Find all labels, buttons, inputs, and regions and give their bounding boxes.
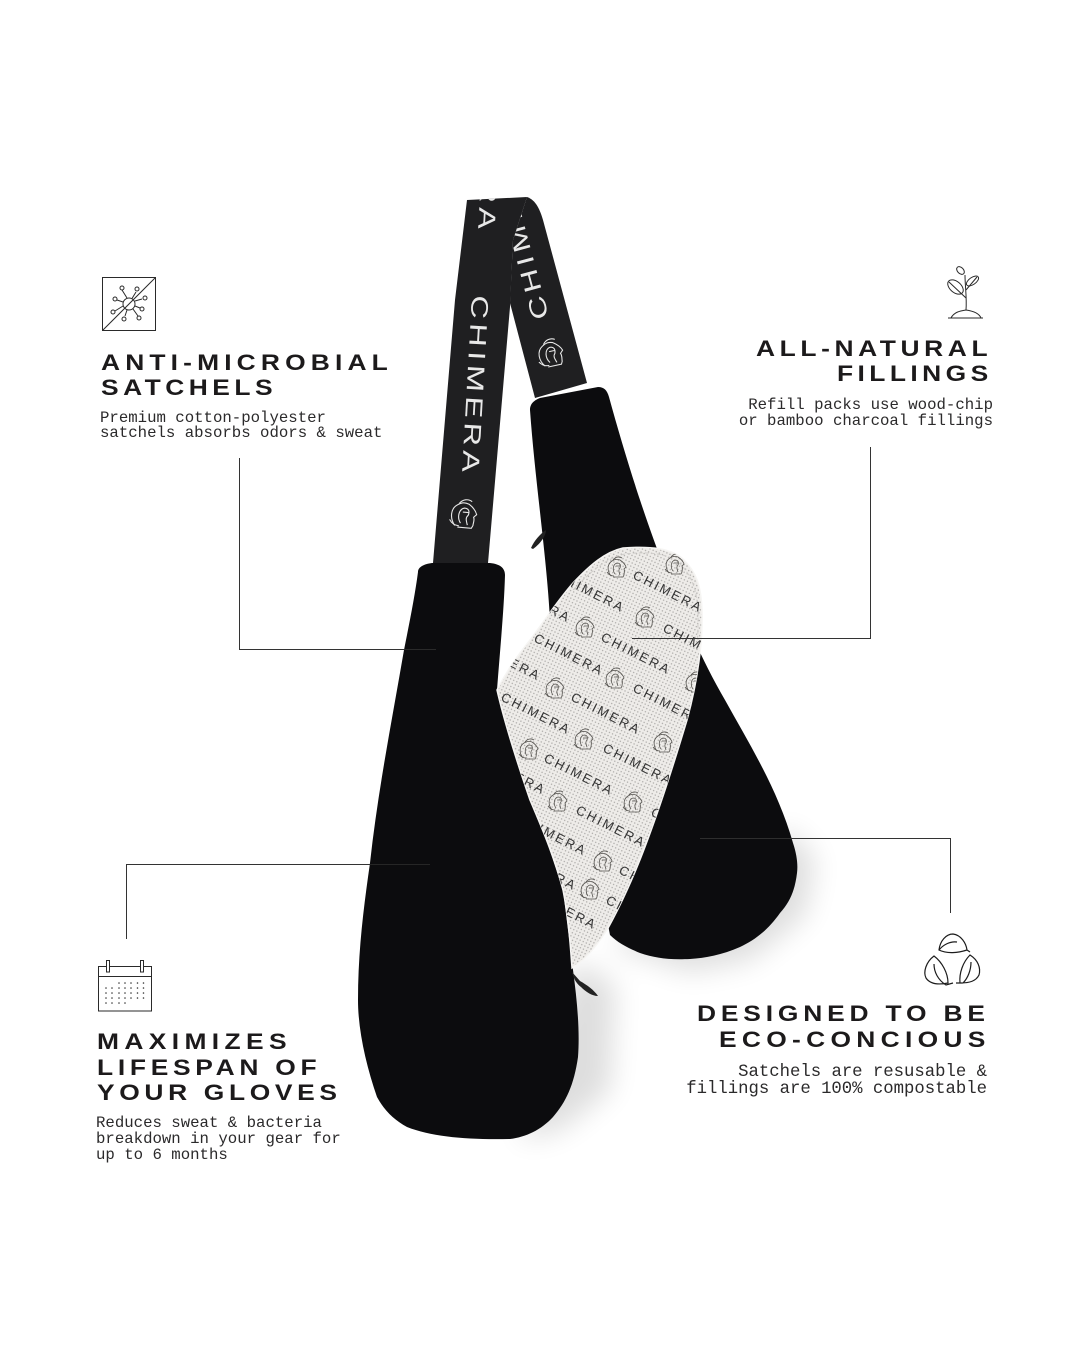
panel lettering: CHIMERA [532, 630, 607, 679]
panel lettering: CHIMERA [599, 629, 674, 678]
text: eco: Satchels are resusable & [738, 1063, 987, 1082]
heading: all-natural: ALL-NATURAL [756, 337, 988, 361]
strap lettering: back: CHIMERA [482, 140, 555, 322]
panel lettering: CHIMERA [499, 689, 574, 738]
text: lifespan [96, 1114, 341, 1164]
panel logos [519, 554, 704, 899]
panel lettering: CHIMERA [569, 689, 644, 738]
panel lettering: CHIMERA [515, 810, 590, 859]
text: lifespan: Reduces sweat & bacteria [96, 1114, 322, 1132]
text: all-natural [739, 396, 993, 430]
zipper pull: lower [572, 972, 598, 996]
panel lettering: CHIMERA [474, 749, 549, 798]
product: front strap [433, 197, 527, 563]
icon: recycling leaves [925, 934, 980, 985]
text: anti-microbial: Premium cotton-polyester [100, 409, 326, 427]
icon: microbe [102, 278, 156, 330]
text: all-natural: Refill packs use wood-chip [748, 396, 993, 414]
strap lettering: front: CHIMERA [456, 295, 493, 477]
heading: eco [697, 1002, 985, 1052]
text: anti-microbial: satchels absorbs odors & sweat [100, 424, 382, 442]
text: anti-microbial [100, 409, 382, 442]
icon: plant [945, 265, 983, 318]
text: lifespan: up to 6 months [96, 1146, 228, 1164]
heading: eco: DESIGNED TO BE [697, 1002, 985, 1026]
panel lettering: CHIMERA [661, 620, 736, 669]
heading: anti-microbial [101, 351, 388, 400]
panel lettering: CHIMERA [505, 845, 580, 894]
panel lettering: CHIMERA [542, 750, 617, 799]
heading: all-natural [756, 337, 988, 386]
heading: anti-microbial: SATCHELS [101, 376, 273, 400]
panel stitching [573, 553, 698, 645]
panel lettering: CHIMERA [617, 862, 692, 911]
zipper pull: upper [531, 530, 546, 549]
panel lettering: CHIMERA [553, 567, 628, 616]
strap lettering: front: CHIMERA [472, 52, 509, 234]
leader line: fillings [632, 447, 870, 638]
leader line: lifespan [126, 864, 430, 939]
product: back satchel [530, 387, 797, 959]
text: lifespan: breakdown in your gear for [96, 1130, 341, 1148]
strap lettering: front [462, 198, 496, 472]
heading: lifespan: LIFESPAN OF [97, 1056, 317, 1080]
panel lettering: CHIMERA [604, 892, 679, 941]
panel lettering [502, 572, 701, 929]
product: front satchel [358, 563, 579, 1139]
panel lettering: CHIMERA [601, 740, 676, 789]
strap logo: front [449, 498, 478, 529]
leader line: anti-microbial [240, 458, 436, 650]
product: dotted refill panel [496, 546, 703, 970]
panel lettering: CHIMERA [631, 567, 706, 616]
icon: calendar [98, 960, 152, 1011]
text: all-natural: or bamboo charcoal fillings [739, 412, 993, 430]
text: eco [686, 1063, 987, 1099]
heading: lifespan [97, 1030, 337, 1105]
strap logo: back [535, 337, 565, 369]
panel lettering: CHIMERA [525, 884, 600, 933]
text: eco: fillings are 100% compostable [686, 1080, 987, 1099]
panel lettering: CHIMERA [574, 802, 649, 851]
heading: lifespan: MAXIMIZES [97, 1030, 287, 1054]
leader line: eco [700, 838, 950, 913]
panel lettering: CHIMERA [631, 680, 706, 729]
panel lettering: CHIMERA [499, 577, 574, 626]
product: shadows [520, 830, 815, 1140]
panel lettering: CHIMERA [469, 635, 544, 684]
panel lettering: CHIMERA [649, 804, 724, 853]
heading: lifespan: YOUR GLOVES [97, 1081, 337, 1105]
product: back strap [510, 197, 587, 398]
heading: eco: ECO-CONCIOUS [719, 1028, 985, 1052]
heading: anti-microbial: ANTI-MICROBIAL [101, 351, 388, 375]
heading: all-natural: FILLINGS [837, 362, 988, 386]
